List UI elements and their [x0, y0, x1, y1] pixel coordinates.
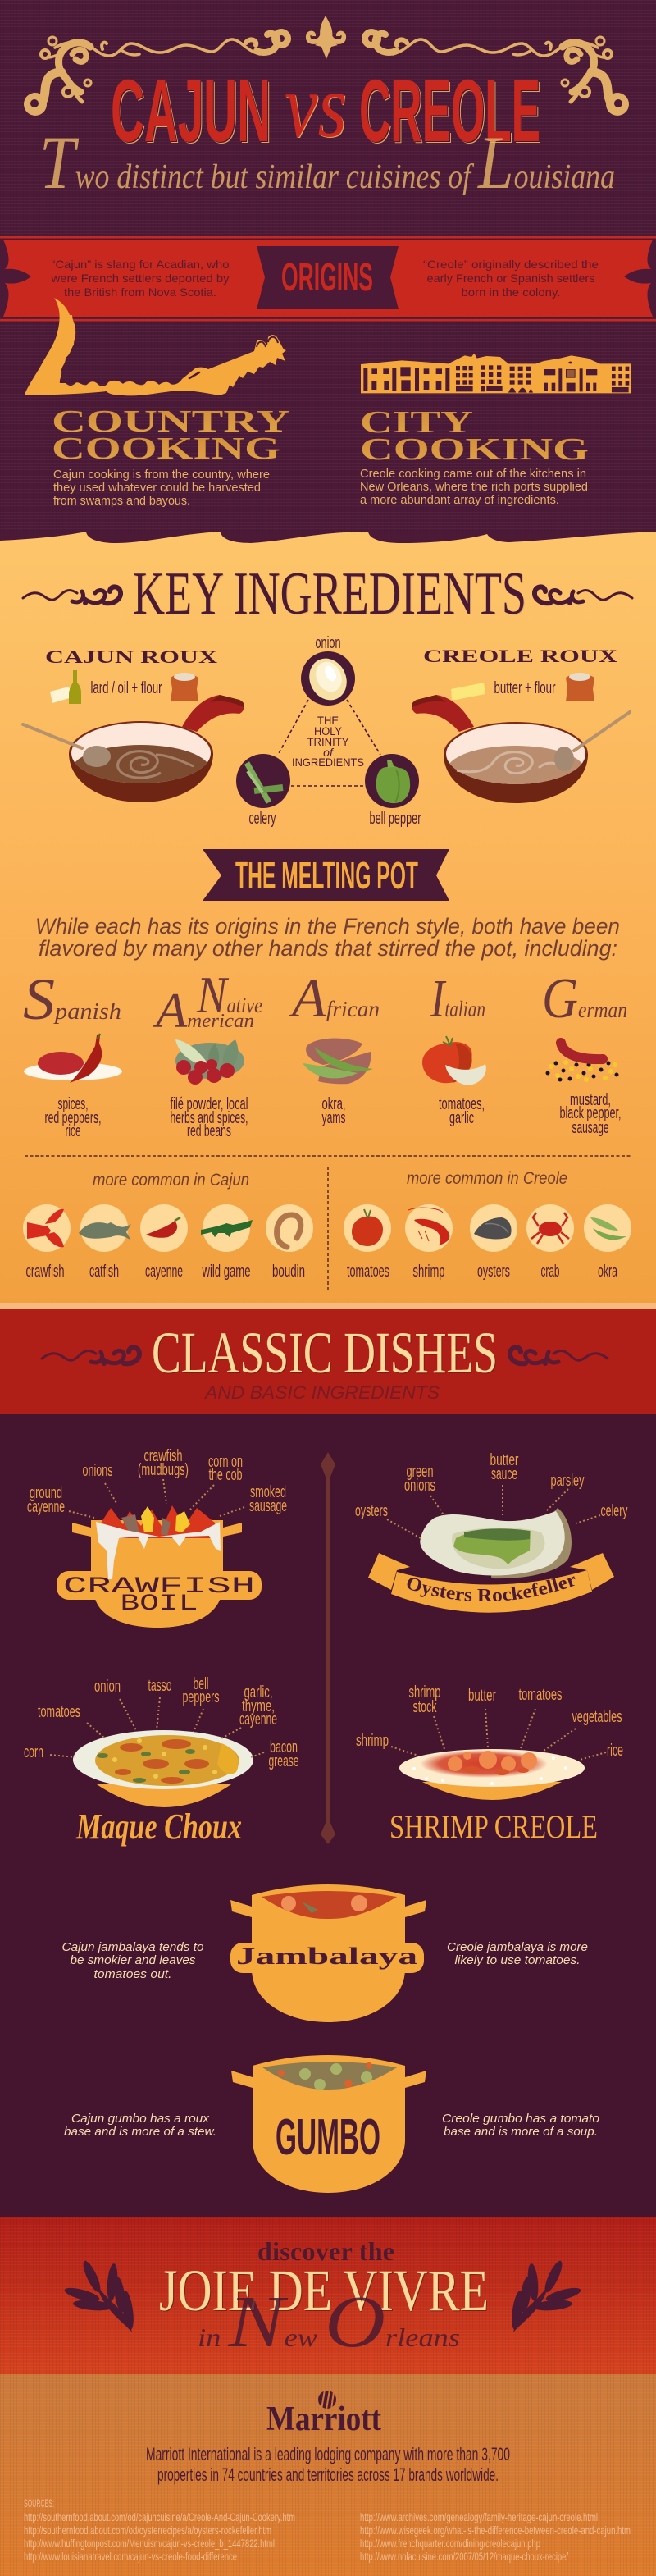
callouts: oysters rockefeller ingredients: celery: [600, 1502, 628, 1520]
icon: cajun pan handle: [182, 695, 244, 732]
heading: discover the: discover the: [257, 2236, 394, 2266]
callouts: crawfish boil ingredients: cayenne: [27, 1498, 65, 1516]
heading: City Cooking: [360, 405, 589, 467]
icon: oyster: [470, 1204, 517, 1252]
text: Creole jambalaya note: Creole jambalaya is more: [447, 1941, 588, 1954]
text: Marriott description: [146, 2444, 510, 2485]
icon: creole pan handle: [412, 695, 474, 732]
text: holy trinity of ingredients: THE: [317, 714, 339, 727]
text: country cooking description: Cajun cooking is from the country, where: [53, 468, 270, 482]
label: gumbo: GUMBO: [276, 2109, 380, 2166]
icon: shrimp: [405, 1204, 453, 1252]
callouts: crawfish boil ingredients: the cob: [208, 1466, 243, 1484]
text: Cajun jambalaya note: tomatoes out.: [93, 1968, 172, 1981]
text: city cooking description: a more abundant array of ingredients.: [360, 494, 559, 507]
callouts: oysters rockefeller ingredients: [355, 1451, 628, 1538]
icon: cajun pan: [69, 721, 213, 802]
script heading: German: German: [542, 967, 627, 1030]
panel: Jambalaya: [62, 1884, 588, 2022]
heading: more common in Cajun: more common in Cajun: [93, 1171, 249, 1190]
callouts: maque choux ingredients: corn: [24, 1743, 43, 1761]
icon: crawfish and corn filling: [100, 1505, 215, 1538]
icon row: more common in Cajun: [23, 1204, 313, 1252]
panel: holy trinity: [236, 634, 421, 828]
panel: Shrimp Creole: [356, 1683, 623, 1845]
text: Creole jambalaya note: likely to use tomatoes.: [454, 1954, 581, 1967]
label: celery: celery: [249, 810, 276, 828]
icon: alligator: [201, 1204, 253, 1252]
label: African ingredients: yams: [321, 1109, 346, 1127]
label: German ingredients: sausage: [572, 1119, 608, 1137]
label: Italian ingredients: [439, 1095, 485, 1127]
heading: Maque Choux: Maque Choux: [75, 1806, 242, 1847]
callouts: crawfish boil ingredients: crawfish: [144, 1447, 182, 1465]
ornament: classic dishes left swirl: [42, 1347, 139, 1366]
callouts: shrimp creole ingredients: tomatoes: [518, 1686, 563, 1704]
background: orange ingredients section: [0, 532, 656, 1304]
icon: left leaf sprig: [63, 2259, 135, 2332]
icon: butter stick: [451, 683, 485, 700]
icon: plate with corn stew: [73, 1730, 253, 1807]
heading: Country Cooking: [52, 404, 290, 466]
sources list: [24, 2496, 631, 2563]
title word: Cajun: CAJUN: [111, 61, 271, 160]
text: holy trinity of ingredients: INGREDIENTS: [292, 756, 364, 769]
text: Cajun meaning: the British from Nova Scotia.: [64, 285, 216, 299]
callouts: crawfish boil ingredients: sausage: [249, 1497, 287, 1515]
text: city cooking description: Creole cooking came out of the kitchens in: [360, 468, 586, 481]
panel: Creole roux: [412, 646, 630, 803]
callouts: crawfish boil ingredients: ground: [30, 1484, 62, 1502]
heading: Joie de Vivre: JOIE DE VIVRE: [159, 2258, 489, 2323]
logo: Marriott: [266, 2390, 381, 2438]
title: Cajun vs Creole: [111, 56, 540, 160]
icon: alligator silhouette: [25, 298, 286, 395]
title word: vs: vs: [285, 56, 347, 156]
icon: flour sack: [566, 673, 594, 701]
icon: catfish: [79, 1204, 131, 1252]
label: Native American ingredients: red beans: [187, 1122, 231, 1140]
icon row: more common in Creole: [344, 1204, 631, 1252]
icon: okra: [584, 1204, 631, 1252]
text: Creole meaning: [423, 258, 599, 299]
callouts: shrimp creole ingredients: rice: [607, 1742, 623, 1760]
origins label plate: [257, 246, 399, 309]
labels: Cajun ingredient names: catfish: [89, 1263, 119, 1281]
text: Cajun meaning: were French settlers deported by: [50, 272, 230, 285]
background: joie de vivre red section: [0, 2217, 656, 2374]
heading: Country Cooking: COOKING: [52, 432, 280, 466]
text: city cooking description: [360, 468, 588, 507]
text: Creole gumbo note: [442, 2112, 599, 2139]
label: dish title crawfish boil: BOIL: [120, 1592, 198, 1617]
sources list: http://www.huffingtonpost.com/Menuism/cajun-vs-creole_b_1447822.html: [24, 2537, 275, 2550]
panel: Cajun roux: [23, 646, 244, 802]
banner: oysters rockefeller ribbon: [368, 1553, 614, 1613]
column: African influence: [289, 966, 380, 1127]
labels: Cajun ingredient names: cayenne: [145, 1263, 183, 1281]
heading: Classic Dishes: CLASSIC DISHES: [152, 1320, 498, 1386]
ornament: left flourish: [24, 32, 288, 116]
callouts: maque choux ingredients: grease: [269, 1752, 298, 1770]
subheading: and basic ingredients: AND BASIC INGREDIENTS: [203, 1382, 440, 1403]
text: Cajun meaning: [50, 258, 230, 299]
icon: right leaf sprig: [510, 2259, 582, 2332]
icon: okra and yams: [303, 1039, 373, 1084]
label: bell pepper: bell pepper: [369, 810, 421, 828]
sources list: http://southernfood.about.com/od/oysterrecipes/a/oysters-rockefeller.htm: [24, 2523, 271, 2537]
labels: Creole ingredient names: oysters: [477, 1263, 510, 1281]
labels: Cajun ingredient names: crawfish: [26, 1263, 64, 1281]
text: melting pot intro: [35, 914, 620, 961]
heading: City Cooking: COOKING: [360, 432, 589, 467]
background: purple header section: [0, 0, 656, 550]
text: country cooking description: [53, 468, 270, 508]
banner: the melting pot: [203, 849, 449, 901]
heading: City Cooking: CITY: [360, 405, 473, 440]
icon: French Quarter buildings: [361, 354, 631, 393]
heading: Creole roux: CREOLE ROUX: [423, 646, 617, 666]
ornament: right flourish: [365, 32, 629, 116]
panel: origins banner: [0, 236, 656, 322]
icon: cayenne: [140, 1204, 188, 1252]
background: red light strip: [0, 1303, 656, 1309]
logo wordmark: Marriott: [266, 2400, 381, 2438]
callouts: shrimp creole ingredients: butter: [468, 1687, 496, 1705]
script heading: Spanish: Spanish: [23, 966, 121, 1032]
icon: pot: [57, 1520, 262, 1628]
callouts: oysters rockefeller ingredients: green: [407, 1463, 433, 1481]
callouts: oysters rockefeller ingredients: onions: [404, 1477, 435, 1495]
header ornament: [24, 16, 629, 116]
text: country cooking description: they used whatever could be harvested: [53, 482, 261, 495]
labels: Cajun ingredient names: boudin: [272, 1263, 305, 1281]
callouts: oysters rockefeller ingredients: oysters: [355, 1502, 388, 1520]
text: Creole jambalaya note: [447, 1941, 588, 1967]
trinity connecting dashes: [278, 700, 380, 786]
callouts: maque choux ingredients: [24, 1675, 298, 1770]
label: Italian ingredients: garlic: [449, 1109, 474, 1127]
text: Cajun gumbo note: [64, 2112, 216, 2139]
text: butter flour: butter + flour: [494, 679, 556, 697]
label: Native American ingredients: herbs and spices,: [171, 1109, 248, 1127]
text: Creole gumbo note: Creole gumbo has a tomato: [442, 2112, 599, 2126]
callouts: crawfish boil ingredients: onions: [82, 1462, 113, 1480]
text: melting pot intro: flavored by many other hands that stirred the pot, including:: [39, 936, 617, 961]
panel: Gumbo: [64, 2055, 599, 2193]
panel: Oysters Rockefeller: [355, 1451, 628, 1613]
label: Native American ingredients: filé powder, local: [171, 1095, 248, 1113]
labels: Creole ingredient names: crab: [541, 1263, 559, 1281]
icon: celery: [236, 754, 290, 808]
sources list: SOURCES:: [24, 2496, 54, 2510]
label: Native American ingredients: [171, 1095, 248, 1140]
text: lard oil flour: lard / oil + flour: [90, 679, 162, 697]
origins heading: ORIGINS: [281, 256, 373, 299]
text: Cajun gumbo note: Cajun gumbo has a roux: [71, 2112, 210, 2126]
text: melting pot intro: While each has its origins in the French style, both have been: [35, 914, 620, 939]
callouts: maque choux ingredients: thyme,: [242, 1697, 275, 1715]
text: country cooking description: from swamps and bayous.: [53, 495, 190, 508]
divider: spear between dishes: [321, 1452, 335, 1844]
column: Native American influence: [153, 966, 262, 1140]
label: Spanish ingredients: spices,: [57, 1095, 89, 1113]
banner: the melting pot: THE MELTING POT: [235, 854, 418, 897]
label: Spanish ingredients: [44, 1095, 102, 1140]
label: Spanish ingredients: red peppers,: [44, 1109, 102, 1127]
label: dish title crawfish boil: [63, 1574, 255, 1617]
text: holy trinity of ingredients: HOLY: [314, 724, 343, 738]
labels: Cajun ingredient names: [26, 1263, 305, 1281]
icon: creole spoon: [554, 712, 630, 771]
text: Cajun jambalaya note: Cajun jambalaya tends to: [62, 1941, 203, 1954]
label: African ingredients: [321, 1095, 346, 1127]
label: Spanish ingredients: rice: [66, 1122, 80, 1140]
script heading: Native American: [153, 966, 262, 1038]
icon: oil bottle: [69, 670, 81, 704]
icon: sauce drips: [96, 1522, 221, 1579]
callouts: maque choux ingredients: garlic,: [244, 1683, 272, 1701]
label: German ingredients: black pepper,: [559, 1104, 622, 1122]
label: jambalaya: Jambalaya: [236, 1943, 417, 1970]
callouts: shrimp creole ingredients: [356, 1683, 623, 1760]
callouts: crawfish boil ingredients: (mudbugs): [138, 1461, 189, 1479]
icon: onion: [301, 651, 355, 706]
icon: tomato and garlic: [422, 1036, 486, 1085]
icon: lard block: [50, 687, 72, 703]
labels: Creole ingredient names: [347, 1263, 618, 1281]
column: Italian influence: [422, 969, 486, 1127]
callouts: maque choux ingredients: bell: [194, 1675, 208, 1693]
text: Cajun jambalaya note: be smokier and leaves: [71, 1954, 195, 1967]
callouts: crawfish boil ingredients: [27, 1447, 287, 1518]
text: holy trinity of ingredients: TRINITY: [307, 735, 349, 748]
callouts: maque choux ingredients: tomatoes: [38, 1703, 80, 1721]
label: onion: onion: [315, 634, 341, 652]
panel: Maque Choux: [24, 1675, 298, 1847]
callouts: oysters rockefeller ingredients: sauce: [491, 1465, 517, 1483]
subtitle: Two distinct but similar cuisines of Louisiana: [39, 121, 615, 204]
ornament: classic dishes right swirl: [510, 1347, 608, 1366]
callouts: oysters rockefeller ingredients: butter: [490, 1451, 519, 1469]
callouts: shrimp creole ingredients: vegetables: [572, 1708, 622, 1726]
icon: oyster shell: [420, 1508, 572, 1578]
callouts: maque choux ingredients: onion: [94, 1678, 121, 1696]
column: German influence: [542, 967, 627, 1137]
label: German ingredients: mustard,: [570, 1091, 611, 1109]
icon: fleur-de-lis: [306, 16, 346, 59]
labels: Creole ingredient names: tomatoes: [347, 1263, 390, 1281]
icon: jambalaya pot: [230, 1884, 426, 2022]
callouts: crawfish boil ingredients: smoked: [250, 1483, 286, 1501]
icon: creole pan: [444, 722, 588, 803]
callouts: shrimp creole ingredients: shrimp: [408, 1683, 441, 1701]
text: Creole meaning: “Creole” originally described the: [423, 258, 599, 271]
icon: flour sack: [171, 673, 198, 701]
label: dish title crawfish boil: CRAWFISH: [63, 1574, 255, 1600]
icon: gumbo pot: [231, 2055, 426, 2193]
labels: Creole ingredient names: okra: [598, 1263, 618, 1281]
column: Spanish influence: [23, 966, 122, 1140]
text: Cajun meaning: “Cajun” is slang for Acadian, who: [51, 258, 230, 271]
labels: Cajun ingredient names: wild game: [202, 1263, 251, 1281]
heading: Cajun roux: CAJUN ROUX: [45, 646, 217, 667]
ornament: key ingredients right swirl: [535, 587, 632, 605]
callouts: oysters rockefeller ingredients: parsley: [551, 1472, 584, 1490]
text: holy trinity of ingredients: [292, 714, 364, 769]
torn paper edge: [0, 517, 656, 543]
text: city cooking description: New Orleans, where the rich ports supplied: [360, 481, 588, 494]
icon: spices and chili: [24, 1034, 122, 1083]
panel: Crawfish boil: [27, 1447, 287, 1628]
text: Creole meaning: born in the colony.: [461, 285, 561, 299]
sources list: http://www.frenchquarter.com/dining/creolecajun.php: [360, 2537, 540, 2550]
text: holy trinity of ingredients: of: [323, 746, 335, 759]
text: Creole gumbo note: base and is more of a soup.: [444, 2126, 598, 2139]
label: German ingredients: [559, 1091, 622, 1137]
callouts: maque choux ingredients: bacon: [270, 1738, 298, 1756]
text: Cajun jambalaya note: [62, 1941, 203, 1981]
heading: in New Orleans: in N ew O rleans: [198, 2281, 460, 2363]
logo mark: [318, 2390, 336, 2409]
callouts: shrimp creole ingredients: shrimp: [356, 1732, 389, 1750]
callouts: maque choux ingredients: cayenne: [239, 1710, 277, 1729]
sources list: http://southernfood.about.com/od/cajuncuisine/a/Creole-And-Cajun-Cookery.htm: [24, 2510, 295, 2523]
heading: Country Cooking: COUNTRY: [52, 404, 290, 439]
icon: boudin: [266, 1204, 313, 1252]
sources list: http://www.louisianatravel.com/cajun-vs-creole-food-difference: [24, 2550, 237, 2563]
icon: bell pepper: [365, 754, 419, 808]
icon: plate with shrimp: [399, 1749, 585, 1800]
background: footer orange section: [0, 2374, 656, 2576]
icon: crab: [526, 1204, 574, 1252]
background: dark purple dishes section: [0, 1414, 656, 2217]
icon: crawfish: [23, 1204, 71, 1252]
label: Italian ingredients: tomatoes,: [439, 1095, 485, 1113]
script heading: Native American: Native: [196, 966, 262, 1024]
icon: tomato: [344, 1204, 391, 1252]
script heading: Italian: Italian: [430, 969, 485, 1029]
background: classic dishes red banner: [0, 1309, 656, 1414]
label: African ingredients: okra,: [321, 1095, 346, 1113]
labels: Creole ingredient names: shrimp: [413, 1263, 444, 1281]
icon: cajun spoon: [23, 724, 111, 767]
script heading: Native American: American: [153, 984, 254, 1038]
icon: herbs and beans: [175, 1039, 244, 1085]
icon: sausage and mustard seeds: [546, 1043, 618, 1082]
heading: Shrimp Creole: SHRIMP CREOLE: [390, 1808, 598, 1845]
heading: Key Ingredients: KEY INGREDIENTS: [133, 560, 526, 628]
callouts: maque choux ingredients: peppers: [182, 1688, 220, 1706]
text: Cajun gumbo note: base and is more of a stew.: [64, 2126, 216, 2139]
label: oysters rockefeller: Oysters Rockefeller: [407, 1576, 576, 1601]
script heading: African: African: [289, 966, 380, 1029]
ornament: key ingredients left swirl: [23, 587, 121, 605]
callouts: maque choux ingredients: tasso: [148, 1677, 172, 1695]
heading: more common in Creole: more common in Creole: [407, 1169, 567, 1188]
callouts: crawfish boil ingredients: corn on: [208, 1453, 243, 1471]
callouts: shrimp creole ingredients: stock: [413, 1698, 437, 1716]
text: Creole meaning: early French or Spanish settlers: [426, 272, 595, 285]
